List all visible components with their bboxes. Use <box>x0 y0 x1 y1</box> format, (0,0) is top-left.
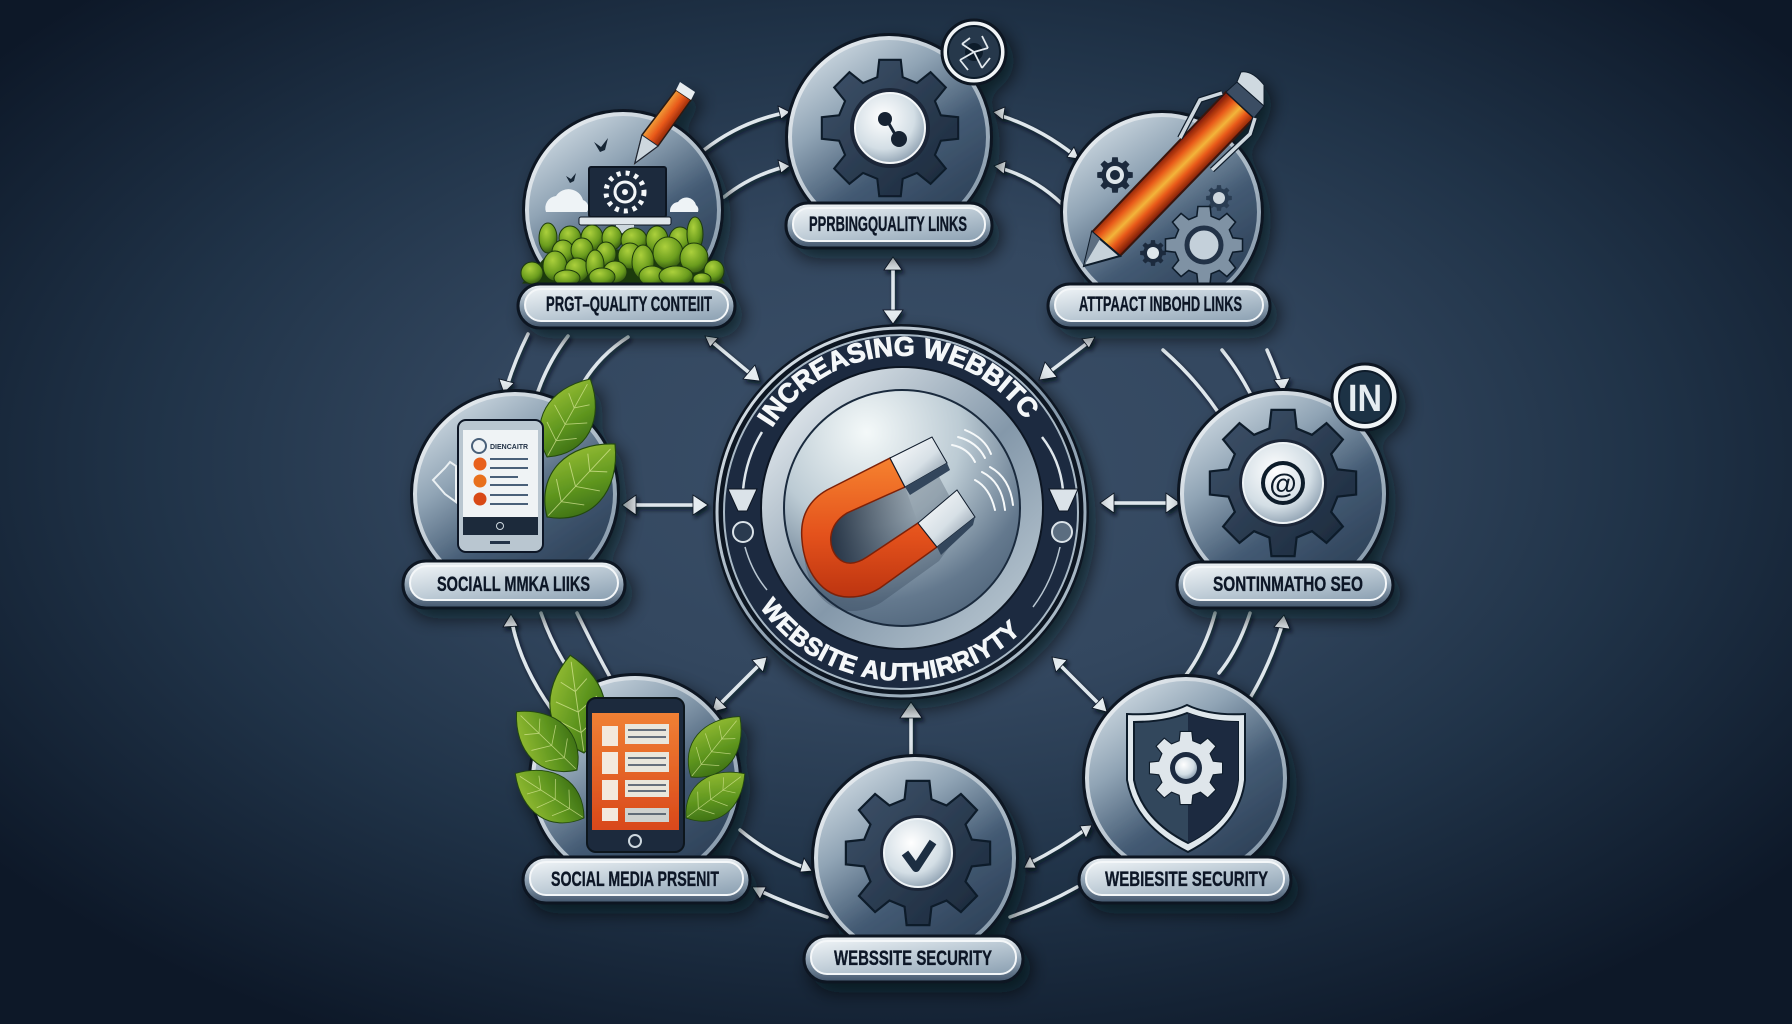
title arc text: INCREASING WEBBITC <box>756 336 1038 428</box>
label: website security centre <box>804 936 1023 982</box>
icon: phone <box>587 698 684 852</box>
label: website security: WEBIESITE SECURITY <box>1105 868 1268 891</box>
arrows: connectors between nodes <box>499 106 1290 917</box>
icon: horseshoe magnet <box>802 437 975 611</box>
arrow: social links to social presence <box>503 613 610 710</box>
arrow: inbound to quality links lower <box>994 161 1062 204</box>
disc <box>815 758 1015 958</box>
label: quality content <box>518 284 735 328</box>
label: social media links: SOCIALL MMKA LIIKS <box>437 573 590 596</box>
badge: network icon <box>942 20 1006 84</box>
subtitle arc text: WEBSITE AUTHIRRIYTY <box>762 596 1017 682</box>
icon: shield with gear <box>1127 705 1245 852</box>
icon: small pen <box>635 82 695 163</box>
disc <box>1181 392 1385 596</box>
arrow: social presence to center <box>712 657 767 712</box>
icon: gear with at sign: @ <box>1269 468 1297 499</box>
disc <box>526 113 720 307</box>
disc <box>1086 678 1286 878</box>
label: social media presence <box>523 857 750 903</box>
arrow: quality links to center <box>883 257 903 324</box>
label: seo <box>1177 562 1393 608</box>
arrow: security to bottom node <box>1010 825 1092 917</box>
inner disc <box>784 390 1020 626</box>
icon: small gears <box>1097 157 1243 284</box>
label: social media presence: SOCIAL MEDIA PRSENIT <box>551 868 719 891</box>
arrow: content to quality links upper <box>704 106 790 150</box>
icon: map outline <box>433 462 456 502</box>
disc <box>1064 114 1260 310</box>
arrow: seo to center <box>1100 493 1180 513</box>
icon: gear with chain link <box>822 60 958 196</box>
outer ring <box>713 324 1089 700</box>
node: quality content (top left) <box>518 82 735 328</box>
central hub: website authority <box>710 320 1110 722</box>
icon: phone <box>458 420 543 552</box>
label: quality links: PPRBINGQUALITY LINKS <box>809 213 967 236</box>
badge: IN: IN <box>1348 378 1382 420</box>
icon: phone: DIENCAITR <box>490 444 528 451</box>
arrow: social links to center <box>622 495 708 515</box>
icon: large pen <box>1084 72 1264 266</box>
arrow: content to center <box>705 336 760 381</box>
disc <box>789 37 989 237</box>
arrow: content to quality links lower <box>724 160 790 197</box>
label: website security centre: WEBSSITE SECURITY <box>834 947 992 970</box>
label: website security <box>1079 857 1291 903</box>
arrow: quality links to inbound upper <box>993 107 1079 159</box>
arrow: bottom node to center <box>900 702 922 758</box>
arrow: content to social links <box>499 334 628 394</box>
icon: laptop <box>579 167 671 233</box>
node: attract inbound links (top right) <box>1048 72 1270 328</box>
node: website security (bottom right) <box>1079 678 1291 903</box>
node: quality links (top) <box>786 20 1006 248</box>
arrow: social presence to bottom node <box>740 830 827 917</box>
node: seo (right) <box>1177 364 1398 608</box>
label: attract inbound links <box>1048 284 1270 328</box>
label: seo: SONTINMATHO SEO <box>1213 573 1363 596</box>
disc <box>532 677 738 883</box>
arrow: seo to security <box>1186 613 1290 698</box>
arrow: security to center <box>1052 657 1107 712</box>
icon: clouds and birds <box>545 138 698 212</box>
label: social media links <box>403 561 625 608</box>
label: quality content: PRGT–QUALITY CONTEIIT <box>546 293 712 316</box>
icon: gear with check <box>846 781 990 925</box>
arrow: inbound to center <box>1039 337 1095 380</box>
icon: gear with at sign <box>1210 410 1356 556</box>
icon: leaves <box>525 367 635 536</box>
label: attract inbound links: ATTPAACT INBOHD LINKS <box>1079 293 1242 316</box>
magnetic field lines <box>952 430 1013 510</box>
badge: IN <box>1332 364 1398 430</box>
inner silver ring <box>760 366 1044 650</box>
node: social media links (left) <box>403 367 635 608</box>
disc <box>414 393 616 595</box>
node: social media presence (bottom left) <box>500 651 757 903</box>
arrow: inbound to seo <box>1163 350 1290 412</box>
node: website check (bottom) <box>804 758 1023 982</box>
label: quality links <box>786 203 992 248</box>
icon: green bushes <box>521 217 724 286</box>
band arrows and knobs <box>728 432 1078 607</box>
icon: leaves <box>500 651 757 837</box>
